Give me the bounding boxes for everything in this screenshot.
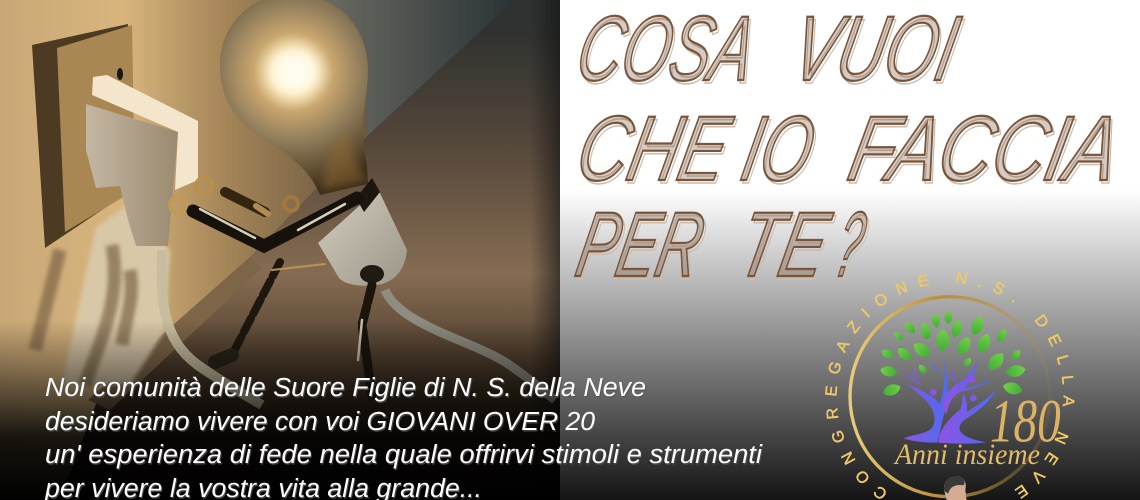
text shadow: un' esperienza di fede nella quale offrirvi stimoli e strumenti xyxy=(46,442,764,470)
lamp holder xyxy=(318,189,407,286)
title: COSA VUOI CHE IO FACCIA PER TE ? xyxy=(569,0,1131,299)
title main layer: TE xyxy=(730,193,838,296)
intro text block xyxy=(44,374,764,500)
text shadow: Noi comunità delle Suore Figlie di N. S. della Neve xyxy=(46,376,647,404)
title shadow layer: TE xyxy=(732,196,840,299)
white plug xyxy=(86,75,198,246)
title main layer xyxy=(569,0,1129,296)
title main layer: IO xyxy=(734,97,824,200)
title main layer: VUOI xyxy=(784,0,968,100)
photo: light bulb figure plugging itself into a socket xyxy=(0,0,560,500)
title shadow layer: CHE xyxy=(571,100,741,203)
text shadow xyxy=(45,376,764,500)
small portrait at ring bottom xyxy=(944,477,967,500)
title shadow layer xyxy=(571,0,1131,299)
title main layer: PER xyxy=(569,193,713,296)
right panel background xyxy=(560,0,1140,500)
title shadow layer: ? xyxy=(830,196,876,299)
dark fade at photo bottom xyxy=(0,320,560,500)
shadow and light under the plug xyxy=(35,204,170,385)
text shadow: desideriamo vivere con voi GIOVANI OVER 20 xyxy=(46,410,596,438)
text lines: un' esperienza di fede nella quale offrirvi stimoli e strumenti xyxy=(45,441,763,469)
anni insieme: Anni insieme xyxy=(893,439,1040,471)
text lines xyxy=(44,374,763,500)
robot arms xyxy=(170,178,357,246)
robot legs xyxy=(215,262,372,395)
wall socket plate xyxy=(32,24,135,248)
glowing bulb xyxy=(220,0,368,195)
lamp cable xyxy=(385,290,555,400)
tree trunk and figures xyxy=(902,358,997,444)
text lines: Noi comunità delle Suore Figlie di N. S. della Neve xyxy=(45,374,646,402)
plug cable xyxy=(162,250,262,405)
text lines: desideriamo vivere con voi GIOVANI OVER 20 xyxy=(45,408,595,436)
title shadow layer: COSA xyxy=(571,0,767,103)
circular congregation name: CONGREGAZIONE N.S. DELLA NEVE xyxy=(825,272,1075,499)
logo: Congregazione N.S. della Neve, 180 anni insieme xyxy=(825,272,1075,500)
number 180: 180 xyxy=(990,388,1061,456)
title main layer: ? xyxy=(828,193,874,296)
title main layer: CHE xyxy=(569,97,739,200)
title main layer: COSA xyxy=(569,0,765,100)
tree leaves xyxy=(879,311,1027,398)
title shadow layer: IO xyxy=(736,100,826,203)
title shadow layer: VUOI xyxy=(786,0,970,103)
gold ring xyxy=(850,297,1050,497)
title shadow layer: PER xyxy=(571,196,715,299)
